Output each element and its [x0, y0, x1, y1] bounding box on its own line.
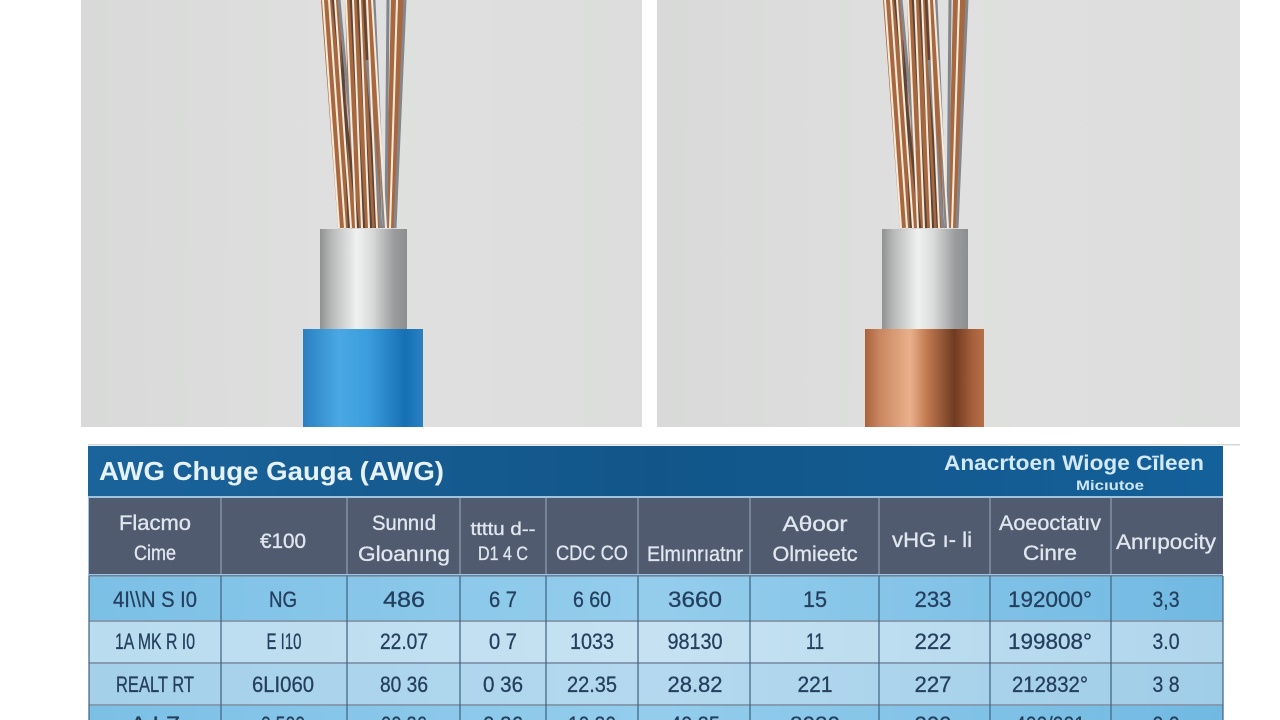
table row 3: 212832°: [1012, 672, 1088, 697]
table row 1: 233: [914, 587, 952, 612]
table row 4 (cropped): [89, 706, 1223, 720]
table row 1: 15: [803, 587, 827, 612]
table row 2: E I10: [266, 629, 302, 654]
table header row: D1 4 C: [478, 544, 528, 565]
table row 2: [89, 622, 1223, 662]
icon: right silver insulation sleeve: [882, 229, 968, 330]
table row 3: 6LI060: [252, 672, 314, 697]
icon: right bare copper strands: [885, 0, 967, 228]
table row 1: 6 7: [489, 587, 517, 612]
table header row: Olmieetc: [772, 543, 858, 566]
table header row: CDC CO: [556, 542, 628, 565]
table row 1: NG: [269, 587, 297, 612]
table row 2: 11: [806, 629, 824, 654]
table row 1: 192000°: [1008, 587, 1092, 612]
table header row: Gloanıng: [358, 543, 450, 566]
table row 1: 6 60: [573, 587, 611, 612]
table row 2: 22.07: [380, 629, 428, 654]
table row 3: 221: [798, 672, 832, 697]
table row 2: 199808°: [1008, 629, 1092, 654]
table header row: €100: [260, 530, 306, 553]
table row 3: 227: [914, 672, 952, 697]
heading: right subtitle: Anacrtoen Wioge Cīleen: [944, 452, 1204, 475]
table header row: [88, 496, 1223, 576]
heading: table title: AWG Chuge Gauga (AWG): [99, 456, 444, 486]
table row 2: 3.0: [1152, 629, 1180, 654]
table header row: Aθoor: [782, 513, 848, 536]
icon: left silver insulation sleeve: [320, 229, 407, 330]
table row 1: 3,3: [1152, 587, 1180, 612]
table header row: Anrıpocity: [1116, 531, 1217, 554]
table header row: Sunnıd: [372, 512, 436, 535]
table row 3: 0 36: [483, 672, 523, 697]
table row 1: 4I\\N S I0: [113, 587, 197, 612]
table row 2: 98130: [668, 629, 722, 654]
table row 1: 486: [383, 587, 425, 612]
table header row: Cinre: [1023, 542, 1077, 565]
table row 3: 3 8: [1152, 672, 1180, 697]
icon: left blue outer jacket: [303, 329, 423, 427]
table header row: Elmınrıatnr: [647, 543, 743, 566]
text: small subtitle note: Micıutoe: [1076, 477, 1144, 493]
table title bar: [88, 446, 1223, 496]
table row 2: 0 7: [489, 629, 517, 654]
table row 3: REALT RT: [116, 672, 194, 697]
table row 1: [89, 577, 1223, 620]
table header row: Flacmo: [119, 512, 191, 535]
table row 3: 80 36: [380, 672, 428, 697]
table header row: Cime: [134, 542, 176, 565]
table row 3: [89, 664, 1223, 704]
table row 2: 1033: [570, 629, 614, 654]
table header row: ttttu d--: [470, 519, 536, 539]
table row 2: 222: [914, 629, 952, 654]
table row 3: 28.82: [668, 672, 722, 697]
table row 3: 22.35: [567, 672, 617, 697]
panel: AWG data table: [88, 444, 1240, 720]
table header row: vHG ı- li: [892, 529, 972, 552]
table row 1: 3660: [668, 587, 722, 612]
icon: right copper outer jacket: [865, 329, 984, 427]
icon: left bare copper strands: [323, 0, 405, 228]
table header row: Aoeoctatıv: [999, 512, 1102, 535]
table row 2: 1A MK R I0: [115, 629, 195, 654]
panel: right wire photo: [657, 0, 1240, 427]
panel: left wire photo: [81, 0, 642, 427]
